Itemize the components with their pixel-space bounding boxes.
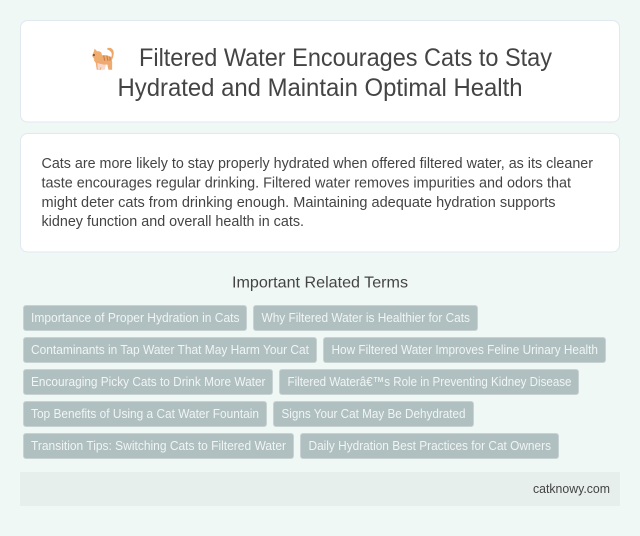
footer source: catknowy.com — [533, 481, 610, 496]
heading: related terms: Important Related Terms — [232, 274, 408, 292]
tag — [274, 402, 474, 426]
tag: Signs Your Cat May Be Dehydrated — [282, 406, 466, 421]
tag: Top Benefits of Using a Cat Water Fountain — [31, 406, 259, 421]
tag — [24, 402, 266, 426]
description text: kidney function and overall health in cats. — [42, 214, 304, 230]
description text: Cats are more likely to stay properly hydrated when offered filtered water, as its cleaner — [42, 156, 593, 172]
tag — [300, 434, 558, 458]
description text: might deter cats from drinking enough. Maintaining adequate hydration supports — [42, 195, 556, 211]
tag: Transition Tips: Switching Cats to Filtered Water — [31, 438, 287, 453]
footer — [20, 472, 620, 506]
tag — [254, 306, 478, 330]
panel: title card — [20, 20, 620, 122]
tag: Contaminants in Tap Water That May Harm Your Cat — [31, 342, 309, 357]
title line 1: Filtered Water Encourages Cats to Stay — [139, 44, 552, 72]
description text: taste encourages regular drinking. Filtered water removes impurities and odors that — [42, 176, 571, 192]
tag — [280, 370, 578, 394]
tag: Importance of Proper Hydration in Cats — [31, 310, 240, 325]
tag: Filtered Waterâ€™s Role in Preventing Kidney Disease — [288, 374, 572, 389]
tag group — [24, 306, 606, 458]
tag — [24, 338, 316, 362]
panel: description card — [20, 134, 620, 252]
tag: Daily Hydration Best Practices for Cat Owners — [308, 438, 551, 453]
tag: Encouraging Picky Cats to Drink More Water — [31, 374, 266, 389]
icon: cat — [92, 48, 114, 70]
tag: Why Filtered Water is Healthier for Cats — [262, 310, 470, 325]
description text — [42, 156, 593, 230]
tag — [24, 434, 294, 458]
tag — [24, 306, 246, 330]
tag — [324, 338, 606, 362]
tag — [24, 370, 272, 394]
title line 2: Hydrated and Maintain Optimal Health — [118, 74, 522, 102]
tag: How Filtered Water Improves Feline Urinary Health — [332, 342, 598, 357]
